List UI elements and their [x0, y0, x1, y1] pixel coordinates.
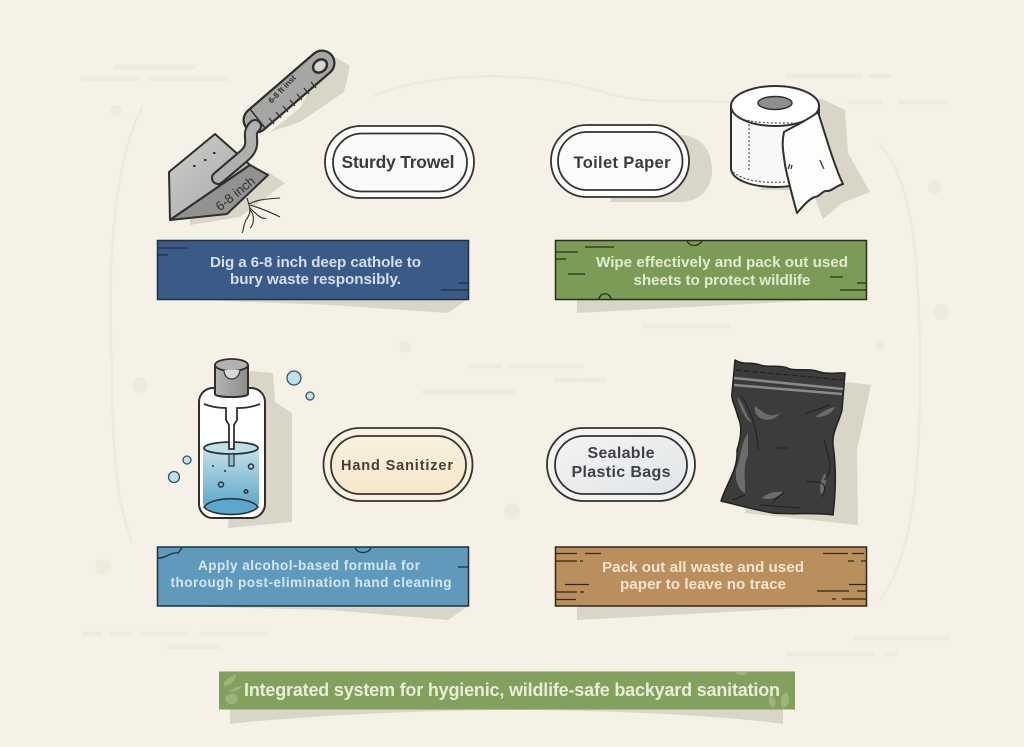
banner: Wipe effectively: Wipe effectively and pack out used [596, 254, 848, 271]
pill: Sealable Plastic Bags: Plastic Bags [572, 464, 671, 481]
banner: Wipe effectively [556, 240, 866, 313]
banner: Apply alcohol-based formula [158, 547, 468, 620]
icon: black sealable bag [721, 360, 871, 525]
label: handle markings: 6-8 ft inst [267, 73, 298, 105]
pill: Toilet Paper: Toilet Paper [574, 154, 671, 172]
icon: toilet paper roll [731, 86, 870, 219]
icon: hand sanitizer bottle [168, 359, 314, 528]
banner: Pack out all waste: paper to leave no trace [620, 576, 786, 593]
pill: Toilet Paper [551, 125, 712, 202]
footer banner: integrated system [219, 672, 795, 724]
pill: Sturdy Trowel: Sturdy Trowel [342, 152, 454, 172]
banner: Apply alcohol-based formula: thorough post-elimination hand cleaning [170, 575, 452, 590]
pill: Hand Sanitizer: Hand Sanitizer [341, 458, 453, 474]
pill: Hand Sanitizer [324, 428, 472, 501]
icon: garden trowel [169, 54, 350, 233]
label: trowel depth: 6-8 inch [212, 173, 258, 214]
pill: Sturdy Trowel [325, 126, 474, 198]
banner: Dig a cathole: bury waste responsibly. [230, 271, 401, 288]
banner: Pack out all waste [556, 547, 866, 620]
footer banner: integrated system: Integrated system for hygienic, wildlife-safe backyard sanitation [244, 680, 780, 700]
banner: Pack out all waste: Pack out all waste and used [602, 559, 804, 576]
pill: Sealable Plastic Bags [547, 428, 695, 501]
banner: Apply alcohol-based formula: Apply alcohol-based formula for [198, 558, 421, 573]
pill: Sealable Plastic Bags: Sealable [588, 445, 655, 462]
banner: Wipe effectively: sheets to protect wildlife [634, 272, 810, 289]
banner: Dig a cathole [158, 240, 468, 313]
banner: Dig a cathole: Dig a 6-8 inch deep cathole to [210, 254, 421, 271]
